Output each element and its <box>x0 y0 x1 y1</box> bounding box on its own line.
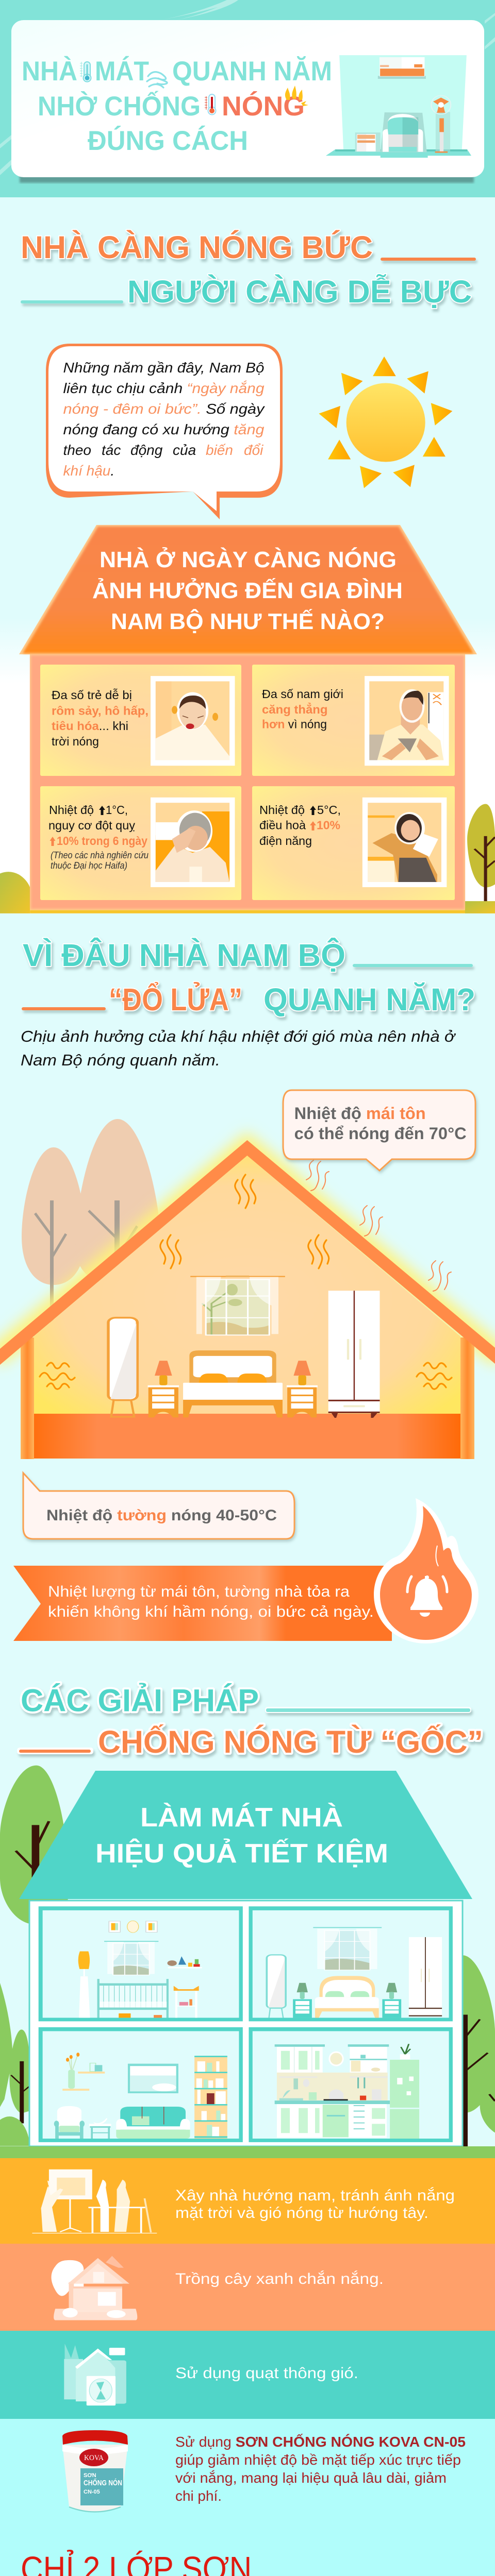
title text: NÓNG <box>222 91 305 122</box>
title text <box>22 56 332 156</box>
panel: men: Đa số nam giới <box>262 687 343 701</box>
mirror <box>108 1318 137 1417</box>
bed <box>183 1350 283 1417</box>
roof <box>19 1771 472 1899</box>
panel: air conditioning: 10% <box>317 818 340 832</box>
panel: children: rôm sảy, hô hấp, <box>52 704 148 717</box>
section heading: root solutions <box>17 1683 483 1759</box>
panel: air conditioning: Nhiệt độ <box>259 803 305 817</box>
text block: climate explanation <box>21 1027 456 1069</box>
callout: roof temperature: Nhiệt độ mái tôn <box>294 1104 426 1123</box>
photo: elderly woman <box>151 798 235 887</box>
heat waves <box>40 1160 452 1389</box>
icon: house and fan <box>64 2344 126 2405</box>
text block: của <box>173 442 196 458</box>
row: ventilation fan: Sử dụng quạt thông gió. <box>175 2365 358 2382</box>
illustration: cool house <box>0 1766 495 2159</box>
title text: ĐÚNG CÁCH <box>88 125 248 156</box>
title card <box>11 20 484 183</box>
ground <box>0 2146 495 2159</box>
panel: stroke risk <box>40 786 241 900</box>
panel: stroke risk: Nhiệt độ <box>49 803 94 817</box>
section heading: why homes burn year round: QUANH NĂM? <box>263 982 475 1017</box>
icon: hot thermometer <box>205 94 216 114</box>
product: paint bucket: SƠN <box>84 2472 96 2479</box>
banner: heat trapped: Nhiệt lượng từ mái tôn, tường nhà tỏa ra <box>48 1583 350 1600</box>
section heading: hotter house, easier to anger <box>21 230 476 309</box>
title text: NHÀ <box>22 56 77 87</box>
panel: stroke risk: nguy cơ đột quỵ <box>48 819 136 832</box>
callout: roof temperature: có thể nóng đến 70°C <box>294 1124 467 1143</box>
panel: children: Đa số trẻ dễ bị <box>52 688 132 702</box>
window <box>190 1276 285 1335</box>
panel: men <box>252 665 455 776</box>
icon: cool thermometer <box>80 62 91 82</box>
text block: động <box>130 442 163 458</box>
icon: up arrow <box>310 806 316 815</box>
text block: liên tục chịu cảnh “ngày nắng <box>63 380 265 396</box>
house interior wall <box>34 1156 460 1417</box>
row: KOVA paint: giúp giảm nhiệt độ bề mặt tiếp xúc trực tiếp <box>175 2452 461 2468</box>
panel: men: hơn vì nóng <box>262 717 327 731</box>
trees <box>0 1766 495 2146</box>
photo: hot man <box>365 676 449 766</box>
panel: children: tiêu hóa... khi <box>52 719 128 733</box>
header background <box>0 0 495 197</box>
title text: QUANH NĂM <box>172 56 332 87</box>
section heading: why homes burn year round: VÌ ĐÂU NHÀ NAM BỘ <box>23 938 345 973</box>
photo: woman cooking <box>362 798 447 887</box>
house body <box>29 1901 463 2146</box>
section heading: hotter house, easier to anger: NHÀ CÀNG NÓNG BỨC <box>21 230 373 265</box>
callout: speech bubble intro <box>46 344 283 519</box>
text block: climate explanation: Nam Bộ nóng quanh năm. <box>21 1051 220 1069</box>
house body <box>30 654 465 910</box>
section heading: why homes burn year round: “ĐỔ LỬA” <box>109 981 242 1017</box>
row: plant trees: Trồng cây xanh chắn nắng. <box>175 2270 384 2287</box>
icon: flames <box>285 86 308 106</box>
row: south facing: Xây nhà hướng nam, tránh ánh nắng <box>175 2187 455 2204</box>
text block <box>63 360 266 479</box>
house roof <box>19 525 477 654</box>
icon: architects <box>32 2170 157 2233</box>
room: nursery <box>39 1906 243 2021</box>
callout: wall temperature: Nhiệt độ tường nóng 40-50°C <box>46 1507 277 1524</box>
text block: tác <box>102 442 121 458</box>
roof question: NHÀ Ở NGÀY CÀNG NÓNG <box>100 546 397 572</box>
panel: house of heat effects <box>0 525 495 913</box>
banner: heat trapped <box>13 1498 478 1643</box>
roof title <box>95 1803 388 1869</box>
room: bedroom <box>249 1906 453 2021</box>
row: KOVA paint: với nắng, mang lại hiệu quả lâu dài, giảm <box>175 2470 447 2486</box>
solution rows <box>0 2158 495 2576</box>
bedroom furniture <box>108 1276 380 1418</box>
row: KOVA paint: Sử dụng SƠN CHỐNG NÓNG KOVA CN-05 <box>175 2433 466 2450</box>
row: south facing <box>0 2158 495 2244</box>
text block: Những năm gần đây, Nam Bộ <box>63 360 264 376</box>
panel: stroke risk: (Theo các nhà nghiên cứu <box>51 850 148 860</box>
trees behind house <box>22 1119 161 1334</box>
roof question: NAM BỘ NHƯ THẾ NÀO? <box>111 608 385 634</box>
callout: wall temperature <box>23 1473 294 1539</box>
panel: air conditioning: điện năng <box>259 834 312 848</box>
icon: wind <box>147 72 167 88</box>
icon: sun <box>319 357 452 488</box>
roof question <box>92 546 403 634</box>
icon: house and tree <box>51 2256 137 2320</box>
product: paint bucket: CHỐNG NÓN <box>84 2478 122 2487</box>
floor <box>34 1414 460 1459</box>
product: paint bucket <box>62 2430 128 2512</box>
text block: khí hậu. <box>63 463 114 479</box>
ground and trees <box>0 804 495 913</box>
section heading: why homes burn year round <box>22 938 475 1017</box>
room: kitchen <box>249 2027 453 2142</box>
callout: roof temperature <box>283 1090 475 1171</box>
panel: stroke risk: 1°C, <box>106 803 128 817</box>
icon: up arrow orange <box>50 837 56 846</box>
row: KOVA paint <box>0 2419 495 2576</box>
icon: flame alarm <box>374 1498 478 1643</box>
illustration: burning hot house <box>0 1119 495 1459</box>
panel: air conditioning: 5°C, <box>317 803 341 817</box>
text block: đổi <box>244 442 263 458</box>
product: paint bucket: CN-05 <box>84 2489 100 2495</box>
row: plant trees <box>0 2244 495 2331</box>
row: KOVA paint: chi phí. <box>175 2488 222 2504</box>
text block: nóng đang có xu hướng tăng <box>63 421 265 437</box>
room: living room <box>39 2027 243 2142</box>
illustration: cool room <box>326 55 471 158</box>
panel: stroke risk: thuộc Đại học Haifa) <box>51 860 127 871</box>
icon: up arrow <box>99 806 105 815</box>
banner: heat trapped: khiến không khí hầm nóng, oi bức cả ngày. <box>48 1603 374 1620</box>
title text: MÁT <box>95 56 149 87</box>
text block: theo <box>63 442 91 458</box>
panel: air conditioning <box>252 786 455 900</box>
section heading: root solutions: CÁC GIẢI PHÁP <box>21 1683 259 1718</box>
nightstands and lamps <box>148 1361 318 1417</box>
panel: air conditioning: điều hoà <box>259 818 306 832</box>
panel: men: căng thẳng <box>262 702 328 716</box>
roof <box>0 1140 495 1365</box>
roof title: HIỆU QUẢ TIẾT KIỆM <box>95 1838 388 1869</box>
section heading: root solutions: CHỐNG NÓNG TỪ “GỐC” <box>98 1724 483 1759</box>
product: paint bucket: KOVA <box>84 2454 104 2462</box>
row: ventilation fan <box>0 2331 495 2419</box>
roof title: LÀM MÁT NHÀ <box>140 1803 343 1833</box>
row: south facing: mặt trời và gió nóng từ hướng tây. <box>175 2205 428 2222</box>
panel: stroke risk: 10% trong 6 ngày <box>57 834 147 848</box>
walls <box>21 1337 34 1459</box>
heat glow <box>0 1146 495 1358</box>
text block: nóng - đêm oi bức”. Số ngày <box>63 401 266 417</box>
photo: crying baby <box>151 676 235 766</box>
roof question: ẢNH HƯỞNG ĐẾN GIA ĐÌNH <box>92 577 403 603</box>
panel: children <box>40 665 241 776</box>
title text: NHỜ CHỐNG <box>38 91 201 122</box>
section heading: hotter house, easier to anger: NGƯỜI CÀNG DỄ BỰC <box>127 274 472 309</box>
wardrobe <box>328 1291 380 1418</box>
text block: biến <box>206 442 233 458</box>
icon: up arrow orange <box>310 821 316 831</box>
panel: children: trời nóng <box>52 735 99 748</box>
text block: climate explanation: Chịu ảnh hưởng của khí hậu nhiệt đới gió mùa nên nhà ở <box>21 1027 456 1045</box>
